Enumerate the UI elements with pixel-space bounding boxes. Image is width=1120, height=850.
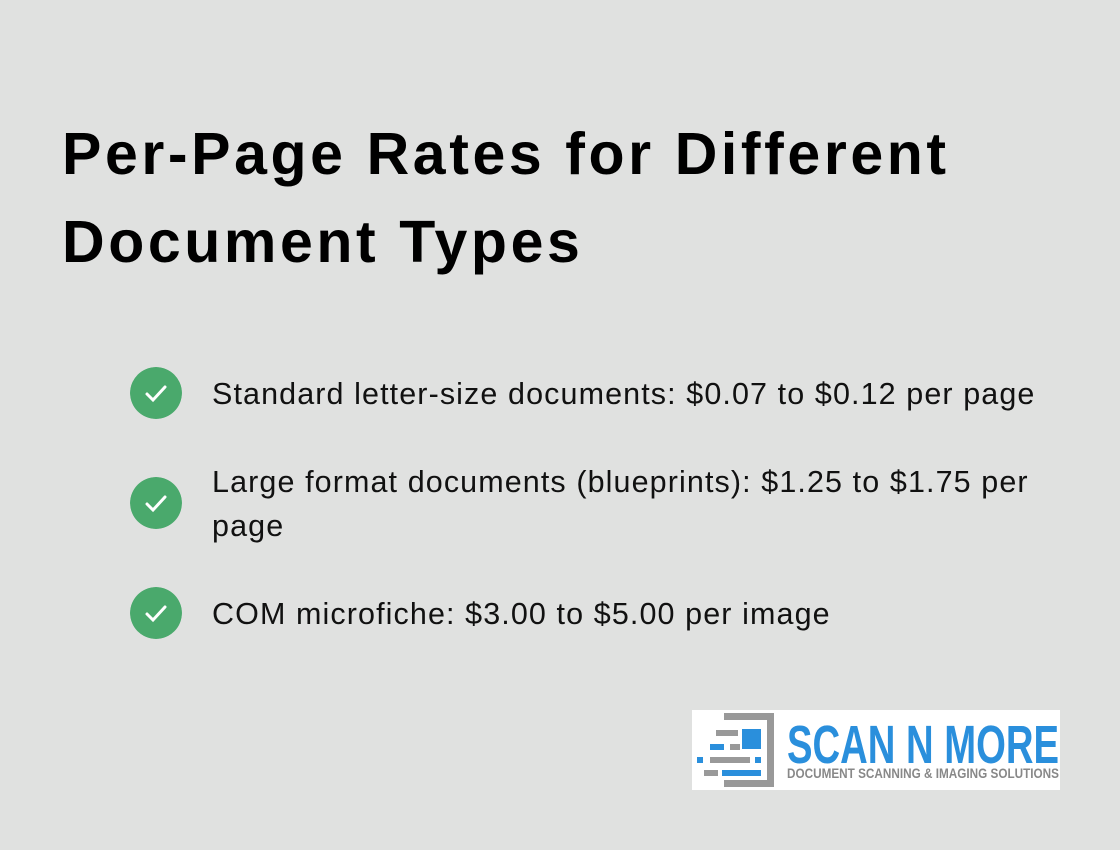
text: COM microfiche: $3.00 to $5.00 per image bbox=[212, 597, 831, 631]
text bbox=[212, 465, 1029, 543]
icon: check bbox=[130, 477, 182, 529]
item: standard bbox=[130, 367, 1036, 419]
title: Document Types bbox=[62, 209, 583, 275]
logo bbox=[692, 710, 1060, 790]
text: Standard letter-size documents: $0.07 to $0.12 per page bbox=[212, 377, 1036, 411]
icon: check bbox=[130, 367, 182, 419]
item: large format bbox=[130, 465, 1029, 543]
text: page bbox=[212, 509, 284, 543]
title: Per-Page Rates for Different bbox=[62, 121, 950, 187]
title bbox=[62, 121, 950, 275]
item: microfiche bbox=[130, 587, 831, 639]
icon: check bbox=[130, 587, 182, 639]
text: Large format documents (blueprints): $1.25 to $1.75 per bbox=[212, 465, 1029, 499]
